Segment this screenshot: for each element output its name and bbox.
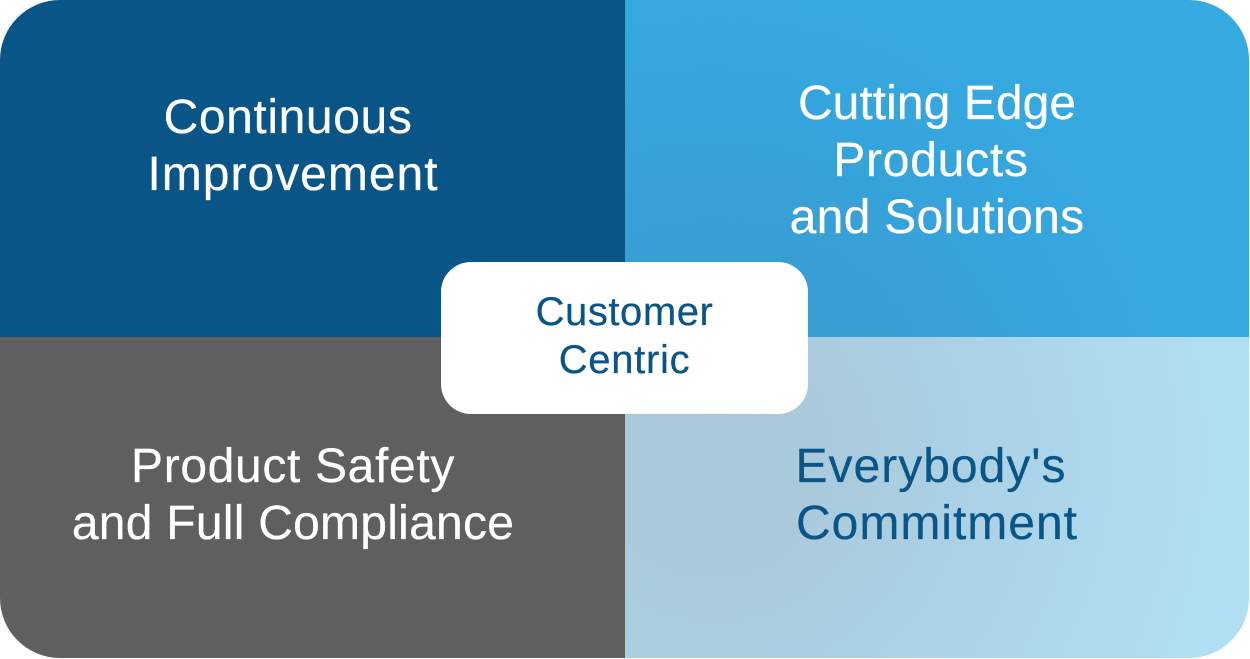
heading: product safety and full compliance: Product Safety [131,440,455,493]
panel: continuous improvement [0,0,625,337]
panel: everybody's commitment [625,337,1249,658]
heading: continuous improvement: Continuous [164,91,412,144]
heading: product safety and full compliance [72,440,514,550]
heading: cutting edge products and solutions: Cutting Edge [798,77,1076,130]
heading: continuous improvement [147,91,439,201]
heading: cutting edge products and solutions: Products [833,134,1029,187]
heading: everybody's commitment: Everybody's [796,440,1066,493]
center label [536,290,713,382]
heading: product safety and full compliance: and Full Compliance [72,497,514,550]
panel: product safety and full compliance [0,337,625,658]
center label: Customer [536,290,713,334]
heading: everybody's commitment [796,440,1078,550]
center card: customer centric [441,262,808,414]
panel: cutting edge products and solutions [625,0,1249,337]
center label: Centric [559,338,690,382]
heading: continuous improvement: Improvement [147,148,439,201]
heading: everybody's commitment: Commitment [796,497,1078,550]
heading: cutting edge products and solutions: and Solutions [790,191,1084,244]
heading: cutting edge products and solutions [790,77,1084,244]
